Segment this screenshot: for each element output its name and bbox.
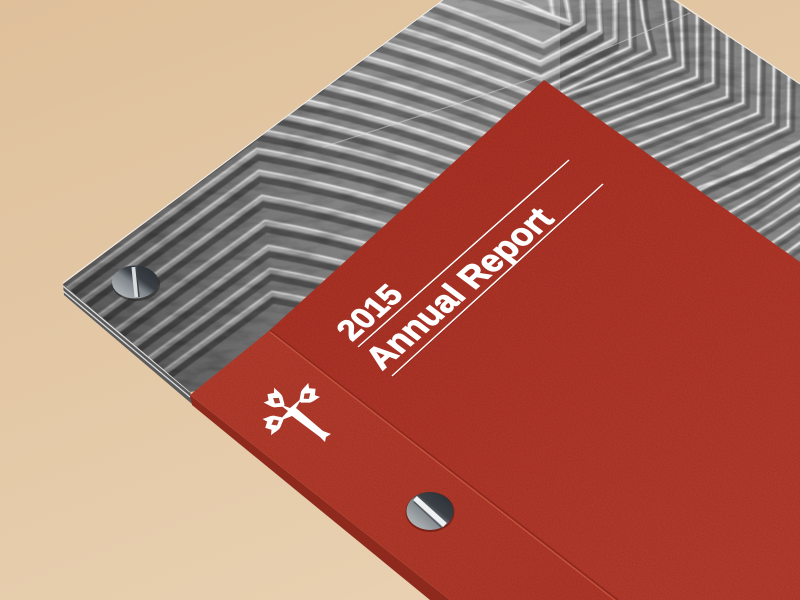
paper stack edge (63, 284, 192, 404)
heading: annual report: Annual Report (357, 201, 562, 376)
icon: floral cross emblem (261, 382, 331, 442)
flower head upper left (262, 387, 289, 413)
heading: year: 2015 (329, 278, 410, 346)
rule below title (392, 184, 603, 377)
dark mottling (60, 0, 800, 400)
chevron stripes: left section (66, 0, 620, 378)
upper band highlight (322, 0, 560, 184)
cross shaft (279, 398, 331, 442)
paper texture (180, 70, 800, 600)
rule above year line (358, 160, 569, 348)
lower-left shading (63, 130, 344, 392)
fold crease (323, 13, 690, 147)
flower head lower left (261, 410, 287, 436)
cover main face (270, 80, 800, 600)
cover side edge (190, 395, 450, 600)
spine crease (270, 330, 618, 600)
screw: on grey page (112, 266, 160, 301)
panel: grey engraved wood-grain back page (63, 0, 800, 392)
chevron stripes: right section (540, 0, 800, 268)
panel: red cover (180, 70, 800, 600)
flower head upper right (294, 382, 321, 409)
cover spine flap (190, 330, 618, 600)
top paper edge (63, 0, 800, 283)
screw: on red spine (406, 492, 454, 532)
